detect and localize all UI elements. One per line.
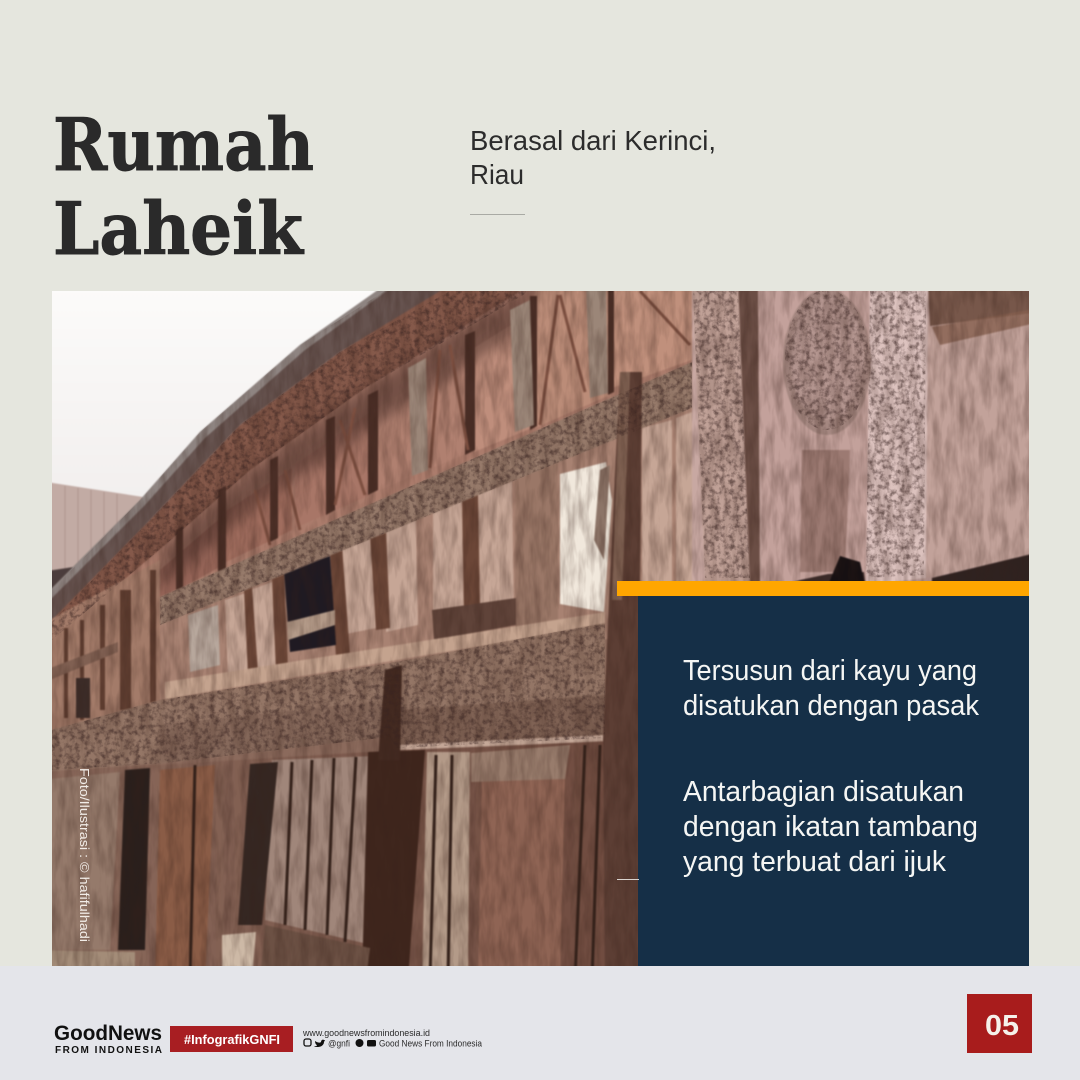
right carved facade — [691, 291, 1004, 581]
title: Rumah — [53, 102, 314, 187]
orange accent bar — [617, 581, 1029, 596]
contact details — [302, 1028, 482, 1048]
page number: 05 — [985, 1010, 1019, 1042]
main carved beam — [160, 362, 692, 625]
contact details: www.goodnewsfromindonesia.id — [302, 1028, 430, 1038]
hashtag badge — [170, 1026, 293, 1052]
dark window — [284, 556, 336, 652]
description text: Antarbagian disatukan — [683, 776, 964, 808]
icon: youtube — [367, 1040, 376, 1046]
background building — [52, 482, 143, 571]
left wall small panels — [52, 562, 160, 640]
photo: traditional wooden house — [40, 280, 1042, 980]
panel: description — [617, 581, 1029, 966]
lower carved band — [40, 623, 605, 772]
description text — [683, 655, 979, 878]
icon: instagram — [304, 1039, 311, 1046]
title: Laheik — [53, 186, 305, 271]
contact details: Good News From Indonesia — [379, 1038, 482, 1048]
description text: yang terbuat dari ijuk — [683, 846, 946, 878]
foreground post — [603, 372, 642, 980]
subtitle: origin — [470, 125, 716, 190]
contact details: @gnfi — [328, 1038, 350, 1048]
dark openings — [118, 768, 150, 950]
subtitle: origin: Riau — [470, 159, 524, 190]
white patch — [560, 462, 612, 612]
roof — [52, 291, 441, 620]
carved pillars — [694, 291, 748, 581]
planks — [40, 745, 570, 980]
description text: dengan ikatan tambang — [683, 811, 978, 843]
description text: disatukan dengan pasak — [683, 690, 979, 722]
footer — [0, 966, 1080, 1080]
logo: GoodNews: GoodNews — [54, 1022, 162, 1045]
upper wall — [124, 291, 692, 584]
gable panels — [160, 285, 692, 600]
logo: GoodNews — [54, 1022, 162, 1056]
title — [53, 102, 314, 271]
icon: facebook — [356, 1039, 364, 1047]
carved medallion — [783, 289, 871, 435]
carved strips and dark posts of gable — [176, 285, 614, 594]
sky — [52, 291, 378, 498]
description text: Tersusun dari kayu yang — [683, 655, 977, 687]
lower upper-wall panels — [600, 440, 676, 640]
photo credit: Foto/Ilustrasi : © hafifulhadi — [77, 768, 91, 942]
hashtag badge: #InfografikGNFI — [184, 1033, 280, 1047]
icon: twitter — [314, 1040, 325, 1047]
subtitle: origin: Berasal dari Kerinci, — [470, 125, 716, 156]
ground level wall — [199, 741, 638, 966]
texture — [52, 291, 1029, 966]
page number — [967, 994, 1032, 1053]
logo: GoodNews: FROM INDONESIA — [55, 1045, 162, 1056]
eave shadow — [160, 285, 530, 590]
